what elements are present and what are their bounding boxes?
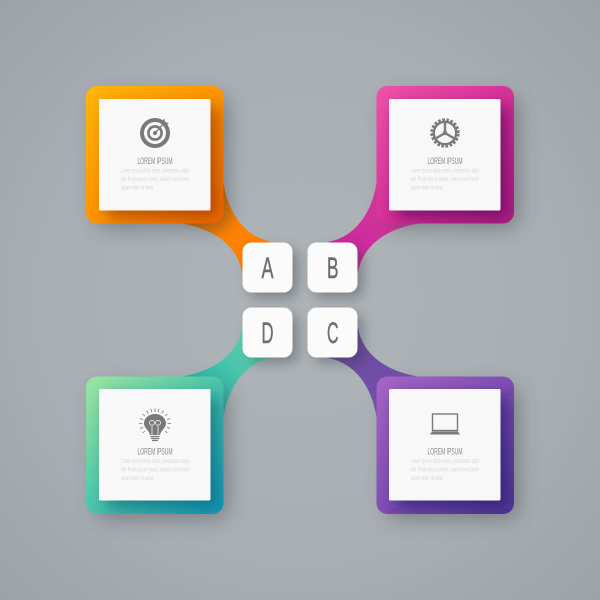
icon: laptop: [430, 414, 460, 434]
card: A coloured frame: [86, 86, 224, 224]
card: B coloured frame: [376, 86, 514, 224]
body text: ipsum dolor sit amet: [121, 476, 153, 482]
icon: target: [142, 118, 169, 146]
body text: [121, 168, 189, 192]
connector: C: [328, 328, 430, 430]
panel: C: [376, 376, 518, 518]
body text: [411, 168, 479, 192]
body text: ipsum dolor sit amet: [121, 186, 153, 192]
tile shadows: [248, 248, 363, 363]
tile: D: D: [262, 317, 274, 350]
body text: Lorem ipsum dolor amet, consectetur adipi: [121, 168, 189, 174]
card: D white panel: [99, 389, 210, 500]
body text: Lorem ipsum dolor amet, consectetur adipi: [411, 168, 479, 174]
card: C coloured frame: [376, 376, 514, 514]
body text: [411, 459, 479, 482]
heading: LOREM IPSUM: [138, 156, 173, 167]
body text: elit. Proin ipsum purus, mauris sed lorem: [121, 468, 189, 474]
icon: light bulb: [139, 408, 171, 440]
tile: B: B: [327, 252, 338, 285]
panel: B: [376, 86, 518, 228]
connector: B: [328, 170, 430, 272]
body text: Lorem ipsum dolor amet, consectetur adipi: [411, 459, 479, 465]
heading: LOREM IPSUM: [138, 446, 173, 458]
tile: A: [242, 242, 292, 292]
heading: LOREM IPSUM: [428, 156, 463, 167]
heading: LOREM IPSUM: [428, 446, 463, 458]
body text: elit. Proin ipsum purus, mauris sed lorem: [121, 177, 189, 183]
tile: D: [242, 308, 292, 358]
connector: D: [170, 328, 272, 430]
body text: ipsum dolor sit amet: [411, 476, 443, 482]
panel: A: [86, 86, 228, 228]
connector: A: [170, 170, 272, 272]
icon: gear: [431, 119, 459, 147]
card: A white panel: [99, 99, 210, 210]
card: B white panel: [389, 99, 500, 210]
panel: D: [86, 376, 228, 518]
body text: elit. Proin ipsum purus, mauris sed lorem: [411, 468, 479, 474]
tile: B: [308, 242, 358, 292]
body text: [121, 459, 189, 482]
card: D coloured frame: [86, 376, 224, 514]
tile: A: A: [262, 252, 274, 285]
card: C white panel: [389, 389, 500, 500]
body text: ipsum dolor sit amet: [411, 186, 443, 192]
body text: Lorem ipsum dolor amet, consectetur adipi: [121, 459, 189, 465]
body text: elit. Proin ipsum purus, mauris sed lorem: [411, 177, 479, 183]
tile: C: [308, 308, 358, 358]
tile: C: C: [327, 317, 338, 350]
